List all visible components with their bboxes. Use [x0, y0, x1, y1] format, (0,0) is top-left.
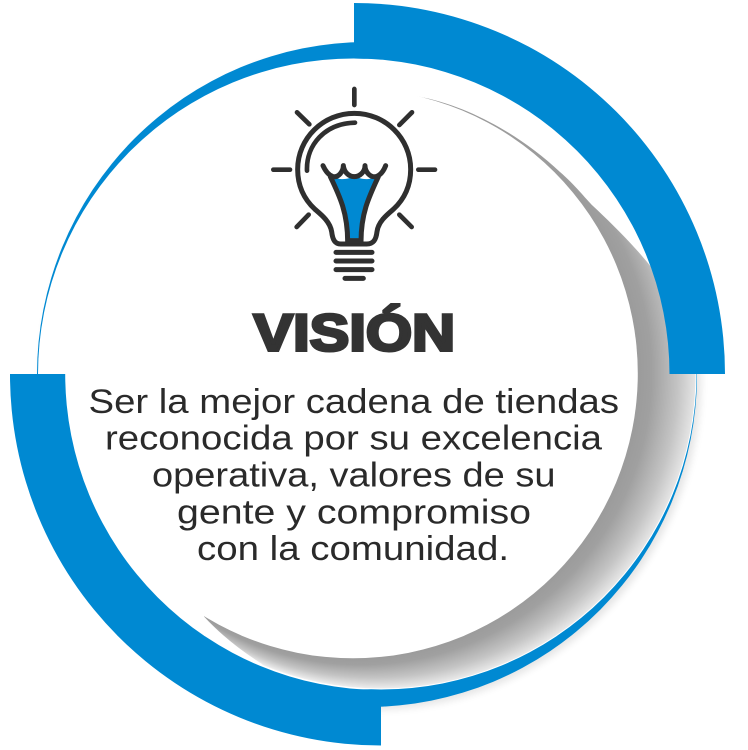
- icon: bulb blue filament fill: [331, 176, 377, 238]
- icon: bulb highlight: [307, 123, 355, 171]
- white front disc: [68, 89, 638, 658]
- body text: reconocida por su excelencia: [105, 420, 602, 458]
- soft shadow under ring: [41, 46, 701, 710]
- body text: gente y compromiso: [177, 494, 531, 532]
- white interior: upper-left circle: [38, 58, 669, 690]
- body text: operativa, valores de su: [152, 456, 556, 494]
- body text: con la comunidad.: [197, 530, 509, 568]
- white interior: lower-right circle: [66, 58, 696, 690]
- heading: VISIÓN: [254, 304, 455, 362]
- body text: Ser la mejor cadena de tiendas: [88, 383, 619, 421]
- grey curled shadow: [204, 96, 720, 720]
- icon: bulb outline: [298, 113, 411, 244]
- body text: [88, 383, 619, 568]
- blue band: top right: [354, 3, 725, 374]
- icon: light rays: [273, 89, 435, 227]
- thin blue disc ring: [37, 42, 697, 707]
- icon: screw base: [336, 252, 372, 278]
- blue band: bottom left: [10, 374, 381, 746]
- soft fade at upper edge of shadow: [606, 150, 720, 300]
- icon: filament: [323, 166, 386, 242]
- icon: light bulb: [273, 89, 435, 278]
